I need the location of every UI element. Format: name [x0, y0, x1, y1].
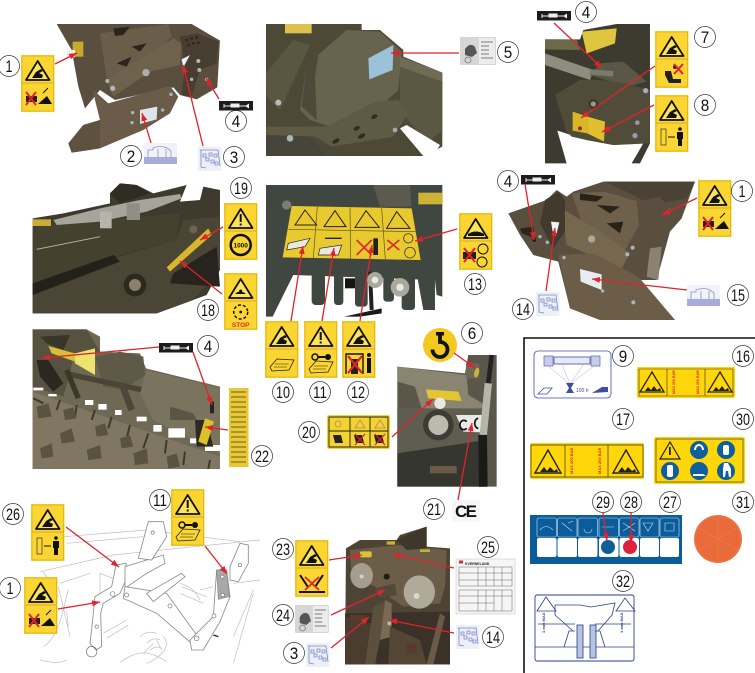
- arrow: decal 12: [360, 245, 372, 321]
- decal 4, lower left: [159, 343, 193, 352]
- tines of the frame: [312, 273, 435, 310]
- decal 12: [342, 321, 376, 378]
- decal 23: [295, 540, 328, 597]
- decal 17: pressure label: MAX 200 BAR: [569, 447, 574, 474]
- callout number 22: 22: [255, 447, 269, 466]
- arrow: decal 11 centre: [322, 248, 334, 321]
- photo: row of decals on frame, middle centre: [266, 185, 443, 317]
- callout number 15: 15: [731, 286, 745, 305]
- photo: lift arm with decals, top right: [545, 24, 650, 163]
- decal 24: [295, 605, 329, 633]
- callout number 1, top left: 1: [6, 57, 12, 76]
- callout number 20: 20: [302, 423, 316, 442]
- decal 32: hitch setting label: [535, 595, 635, 661]
- decal 31: orange reflector: [694, 515, 742, 563]
- callout number 25: 25: [481, 538, 495, 557]
- photo: side view of machine, middle right: [508, 182, 695, 320]
- decal 14, lower centre: [456, 625, 480, 649]
- callout number 1, lower left: 1: [6, 579, 14, 598]
- arrow: decal 25: [393, 554, 454, 568]
- arrow: decal 4 lower left to frame end: [193, 352, 212, 405]
- callout number 18: 18: [201, 301, 215, 320]
- arrow: decal 2: [142, 113, 151, 143]
- decal 7: [655, 31, 688, 88]
- photo: side view of machine, top left: [57, 24, 220, 153]
- callout number 12: 12: [351, 383, 365, 402]
- callout number 19: 19: [234, 179, 248, 198]
- callout number 31: 31: [736, 493, 750, 512]
- arrow: decal 1 top left: [55, 53, 77, 64]
- arrow: decal 4 lower left to rotor: [42, 347, 159, 358]
- decal 9: blue maintenance label: 100 h: [576, 388, 589, 394]
- callout number 32: 32: [616, 572, 630, 591]
- callout number 4, middle right: [498, 170, 518, 192]
- decal 16: pressure label: [637, 367, 735, 398]
- callout number 4, middle right: 4: [504, 172, 512, 191]
- arrow: decal 1 lower left: [58, 602, 100, 609]
- decal 22: [229, 388, 248, 467]
- decal 16: pressure label: MAX 200 BAR: [696, 370, 700, 394]
- callout number 24: 24: [276, 606, 290, 625]
- arrow: decal 4 top right: [554, 23, 602, 68]
- decal 4, top left: [219, 101, 253, 110]
- callout number 14, right: 14: [516, 300, 530, 319]
- decal 1, right: [698, 180, 732, 237]
- callout number 6: [462, 322, 482, 344]
- callout number 11, centre: 11: [313, 383, 327, 402]
- arrow: decal 22: [205, 427, 228, 430]
- callout number 28: 28: [624, 493, 638, 512]
- callout number 29: 29: [596, 493, 610, 512]
- decal 17: pressure label: [530, 443, 644, 479]
- callout number 21: 21: [427, 500, 441, 519]
- decal 16: pressure label: MAX 200 BAR: [672, 370, 676, 394]
- decal 9: blue maintenance label: [534, 351, 611, 398]
- decal 6: hook: [423, 328, 457, 362]
- decal 21: CE mark: [452, 500, 480, 522]
- callout number 4: [226, 110, 246, 132]
- callout number 27: 27: [663, 493, 677, 512]
- arrow: decal 6: [454, 353, 475, 368]
- callout number 26: 26: [6, 505, 20, 524]
- arrow: decal 23: [329, 555, 362, 560]
- photo: frame with yellow decal strip, middle left: [33, 183, 220, 313]
- decal 17: pressure label: MAX 200 BAR: [597, 447, 602, 474]
- arrow: decal 4 top left: [206, 78, 219, 99]
- callout number 9: [612, 346, 634, 366]
- callout number 7: 7: [701, 28, 709, 47]
- decal 30: PPE label: [654, 437, 745, 484]
- decal 1, lower left: [24, 577, 58, 634]
- arrow: decal 21: [458, 423, 472, 500]
- callout number 6: 6: [468, 324, 476, 343]
- callout number 11, lower left: 11: [153, 491, 167, 510]
- decal 20: [327, 415, 390, 449]
- callout number 8: 8: [701, 96, 709, 115]
- callout number 1, right: 1: [738, 182, 746, 201]
- arrow: decal 3 lower centre: [331, 617, 369, 648]
- callout number 4, lower left: 4: [204, 337, 212, 356]
- arrow: decal 1 right: [662, 198, 697, 215]
- callout number 1, right: [732, 180, 752, 202]
- arrow: decal 14 right: [546, 228, 555, 291]
- callout number 9: 9: [619, 347, 627, 366]
- decal 19: [224, 203, 258, 260]
- callout number 1, top left: [0, 56, 20, 76]
- decal 4, right: [521, 175, 555, 184]
- callout number 5: 5: [504, 43, 512, 62]
- arrow: decal 13: [415, 229, 457, 241]
- arrow: decal 10: [291, 246, 303, 321]
- decal 5: [460, 37, 496, 65]
- callout number 3: 3: [230, 148, 238, 167]
- callout number 16: 16: [736, 347, 750, 366]
- photo: hydraulic hose and gauge, centre right: [397, 355, 497, 487]
- arrow: decal 7: [581, 66, 655, 118]
- callout number 30: 30: [736, 410, 750, 429]
- decal 26: [31, 504, 64, 561]
- decal 32: hitch setting label: 1 mm MAX: [541, 612, 546, 633]
- decal 8: [655, 95, 688, 152]
- callout number 2: [120, 146, 142, 166]
- callout number 14, lower centre: 14: [486, 628, 500, 647]
- arrow: decal 8: [602, 105, 654, 132]
- decal 32: hitch setting label: 1 mm MAX: [619, 612, 624, 633]
- decal 15: [687, 285, 720, 306]
- decal 10: [265, 321, 298, 378]
- callout number 5: [498, 42, 518, 62]
- arrow: decal 4 middle right: [525, 184, 534, 240]
- decal 27-29: blue control label: [530, 515, 682, 564]
- callout number 17: 17: [616, 410, 630, 429]
- decal 3, lower centre: [306, 643, 330, 667]
- decal 18: [224, 273, 258, 330]
- callout number 23: 23: [276, 540, 290, 559]
- decal 13: [459, 213, 492, 270]
- decal 18: STOP: [232, 322, 250, 329]
- arrow: decal 19: [200, 227, 223, 240]
- callout number 13: 13: [468, 275, 482, 294]
- callout number 4, top right: [576, 2, 596, 22]
- photo: gearbox with counterweights, lower centre: [345, 527, 450, 664]
- arrow: decal 20: [392, 399, 433, 437]
- callout number 4, lower left: [198, 336, 218, 356]
- callout number 1, lower left: [0, 578, 20, 598]
- panel: spare decals frame: [524, 338, 755, 673]
- arrow: decal 3: [183, 65, 203, 146]
- decal 19: 1000: [233, 242, 248, 250]
- arrow: decal 24: [331, 590, 385, 615]
- callout number 7: [694, 26, 716, 48]
- decal 4, top right: [537, 11, 571, 20]
- photo: rear view of rotary harrow, lower left: [33, 329, 220, 469]
- callout number 4: 4: [232, 112, 240, 131]
- decal 11, lower left: [171, 489, 204, 546]
- arrow: decal 11 lower left: [205, 546, 227, 574]
- decal 14, right: [536, 292, 560, 316]
- arrow: decal 15: [592, 279, 687, 290]
- arrow: number 28 to red button: [630, 513, 632, 543]
- callout number 2: 2: [127, 147, 135, 166]
- arrow: decal 14 lower centre: [389, 620, 454, 633]
- decal 25: data table: [456, 559, 515, 614]
- decal 3: [198, 147, 222, 171]
- arrow: number 29 to blue button: [603, 513, 607, 541]
- decal 11, centre: [304, 321, 338, 378]
- callout number 3, lower centre: 3: [290, 644, 298, 663]
- callout number 8: [694, 94, 716, 116]
- arrow: decal 26: [66, 527, 119, 567]
- callout number 3: [224, 146, 244, 168]
- callout number 4, top right: 4: [582, 3, 590, 22]
- callout number 10: 10: [276, 383, 290, 402]
- decal 25: data table: KVERNELAND: [465, 562, 490, 566]
- decal 1, top left: [21, 55, 54, 112]
- decal 2: [144, 143, 177, 164]
- photo: gearbox housing, top centre: [266, 24, 442, 156]
- illustration: three-point hitch line drawing, lower left: [40, 522, 260, 663]
- callout number 3, lower centre: [284, 642, 304, 664]
- decal 21: CE mark: CE: [455, 502, 477, 521]
- arrow: decal 5: [391, 52, 459, 54]
- arrow: decal 18: [180, 261, 222, 294]
